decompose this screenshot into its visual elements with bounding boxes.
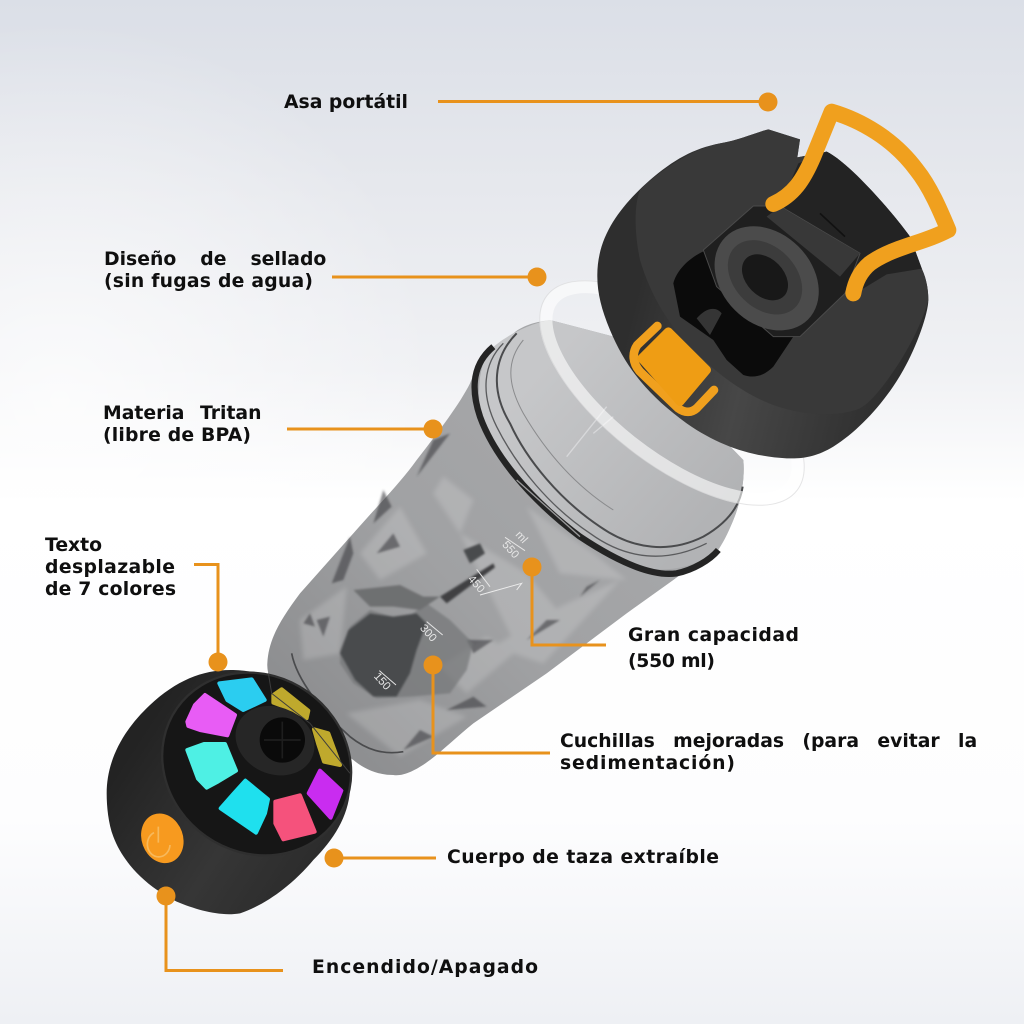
lid top face [636, 129, 928, 414]
callout: gran capacidad: (550 ml) [628, 651, 715, 672]
neck highlights [517, 407, 613, 537]
gradations: 150 [371, 671, 393, 693]
sunken handle recess [780, 152, 922, 297]
lid [597, 112, 948, 458]
lid silhouette [597, 129, 928, 458]
hub [224, 693, 326, 788]
neck threads [497, 333, 743, 547]
callout: materia tritan: (libre de BPA) [103, 425, 251, 446]
callout: diseño de sellado [104, 249, 546, 292]
body silhouette [267, 320, 744, 775]
base silhouette [107, 670, 350, 914]
callout: texto desplazable: desplazable [45, 557, 175, 578]
sealing black ring [475, 347, 718, 574]
callout: cuchillas mejoradas: sedimentación) [560, 753, 735, 774]
callout: cuchillas mejoradas [424, 656, 977, 774]
callout: cuerpo de taza extraíble [324, 847, 719, 868]
base inner line [292, 653, 403, 753]
silicone gasket ring [504, 240, 840, 546]
gradations: 550 [499, 539, 521, 561]
power button [134, 807, 190, 869]
gradations: ml [513, 529, 530, 546]
gradations: 450 [465, 573, 487, 595]
handle [773, 112, 948, 293]
push button [634, 326, 714, 412]
callout: texto desplazable: de 7 colores [45, 579, 176, 600]
callout: gran capacidad [522, 558, 799, 672]
callout: materia tritan: Materia Tritan [103, 403, 261, 424]
neck interior [479, 320, 744, 569]
base top face [126, 636, 387, 892]
callout: texto desplazable: Texto [45, 535, 102, 556]
seal [694, 205, 840, 351]
facets [300, 477, 627, 757]
gradations: 300 [417, 622, 439, 644]
blades [340, 543, 495, 698]
spout base [673, 250, 800, 377]
LED segments [187, 679, 341, 839]
callout: diseño de sellado: Diseño de sellado [104, 249, 326, 270]
spout [703, 206, 860, 337]
bottle edge over base [268, 673, 350, 773]
callout: materia tritan [103, 403, 442, 446]
bottle body [267, 320, 744, 775]
callout: asa portátil [284, 92, 778, 113]
callout: texto desplazable [45, 535, 228, 672]
callout: gran capacidad: Gran capacidad [628, 625, 799, 646]
base unit [107, 636, 387, 914]
gradations [371, 529, 530, 693]
callout: cuerpo de taza extraíble: Cuerpo de taza extraíble [447, 847, 719, 868]
callout: asa portátil: Asa portátil [284, 92, 408, 113]
callout: diseño de sellado: (sin fugas de agua) [104, 271, 313, 292]
callout: cuchillas mejoradas: Cuchillas mejoradas (para evitar la [560, 731, 977, 752]
callout: encendido/apagado [156, 886, 538, 978]
callout: encendido/apagado: Encendido/Apagado [312, 957, 538, 978]
